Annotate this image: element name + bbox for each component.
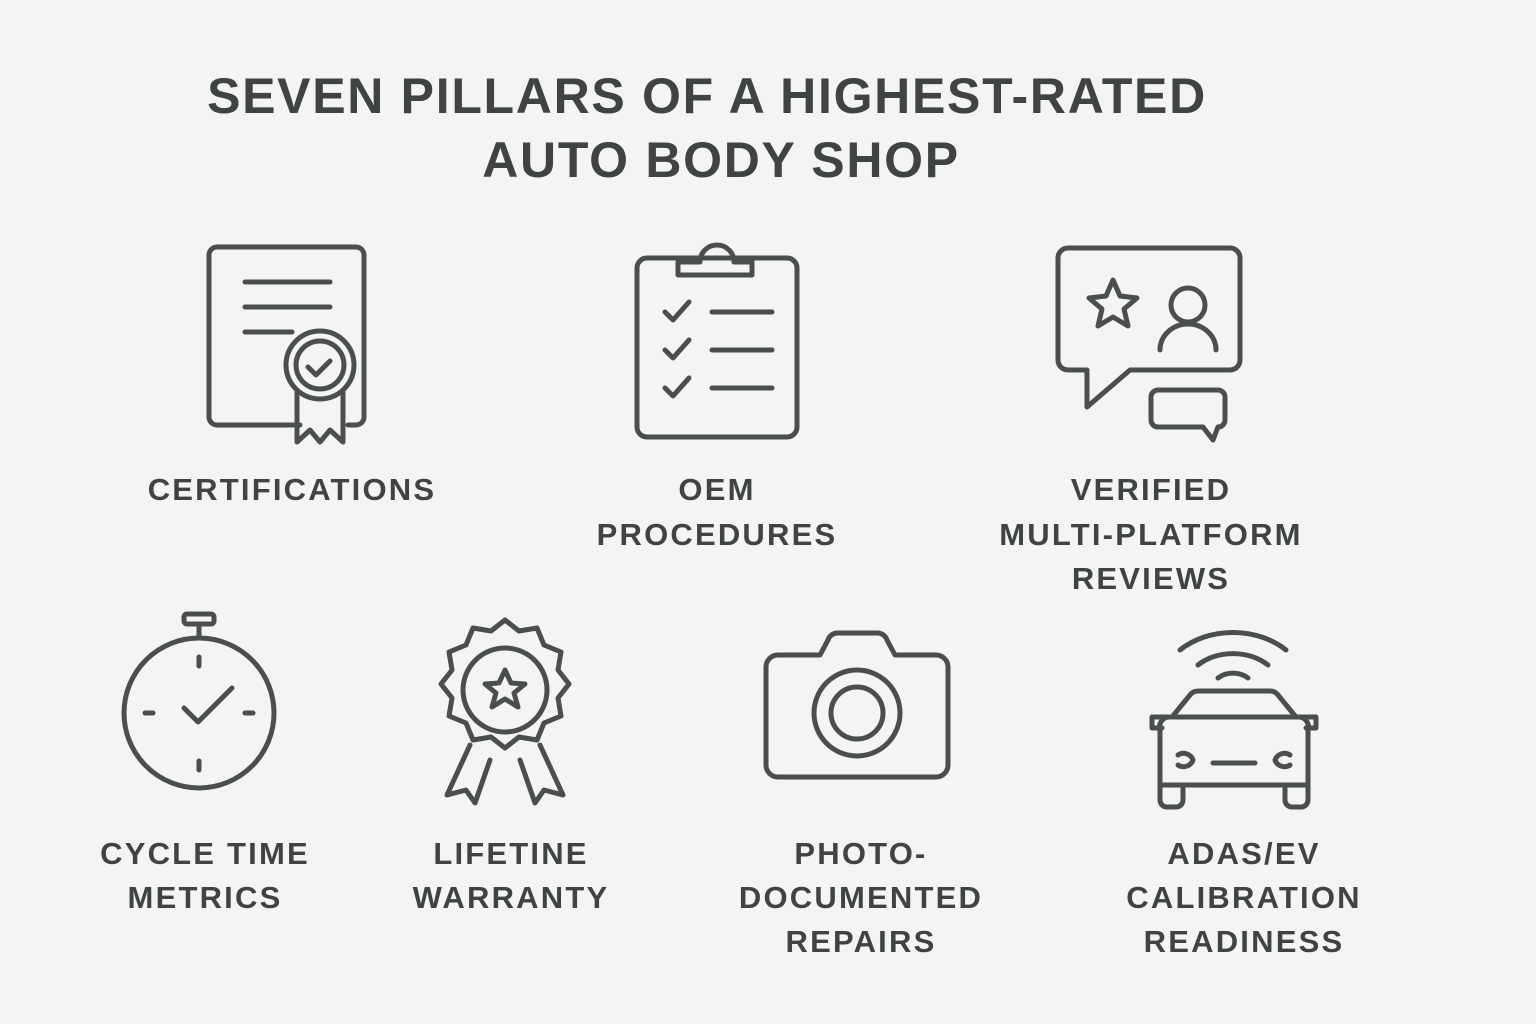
label: cycle time: METRICS <box>128 880 282 915</box>
label: adas ev <box>1126 836 1362 959</box>
label: cycle time <box>100 836 310 915</box>
label: certifications: CERTIFICATIONS <box>148 472 436 507</box>
label: verified reviews: REVIEWS <box>1072 561 1230 596</box>
icon: clipboard <box>637 245 797 437</box>
label: verified reviews: MULTI-PLATFORM <box>999 517 1303 552</box>
label: photo documented: REPAIRS <box>786 924 936 959</box>
label: photo documented: PHOTO- <box>794 836 928 871</box>
label: oem procedures: PROCEDURES <box>597 517 837 552</box>
label: verified reviews <box>999 472 1303 596</box>
title: SEVEN PILLARS OF A HIGHEST-RATED <box>207 68 1207 124</box>
icon: car with signal <box>1152 632 1316 807</box>
icon: certificate <box>209 247 364 442</box>
label: photo documented: DOCUMENTED <box>739 880 983 915</box>
icon: camera <box>766 633 948 777</box>
label: cycle time: CYCLE TIME <box>100 836 310 871</box>
label: adas ev: ADAS/EV <box>1167 836 1321 871</box>
icon: rosette <box>441 620 569 803</box>
icon: stopwatch <box>124 614 274 788</box>
title <box>207 68 1207 188</box>
label: oem procedures <box>597 472 837 552</box>
label: photo documented <box>739 836 983 959</box>
label: adas ev: CALIBRATION <box>1126 880 1362 915</box>
label: adas ev: READINESS <box>1144 924 1344 959</box>
title: AUTO BODY SHOP <box>482 132 960 188</box>
label: lifetime warranty <box>413 836 609 915</box>
label: lifetime warranty: LIFETINE <box>433 836 589 871</box>
label: oem procedures: OEM <box>678 472 756 507</box>
icon: reviews bubble <box>1058 248 1240 440</box>
label: verified reviews: VERIFIED <box>1071 472 1231 507</box>
label: lifetime warranty: WARRANTY <box>413 880 609 915</box>
